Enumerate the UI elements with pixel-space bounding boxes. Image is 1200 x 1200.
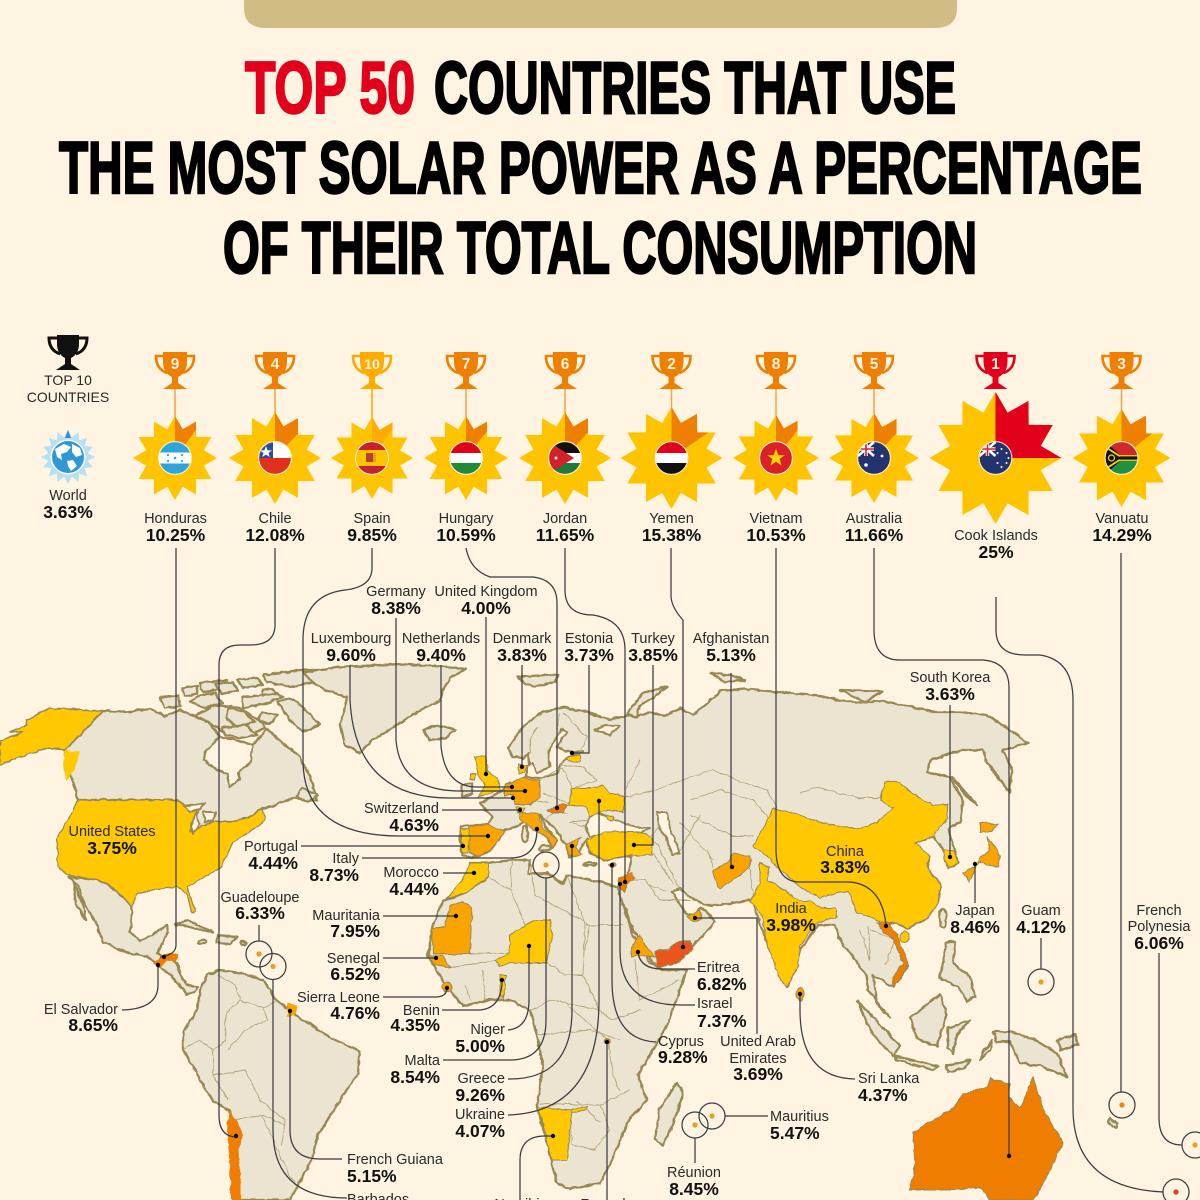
ranking: honduras	[133, 352, 217, 545]
ranking: chile	[229, 352, 322, 545]
label: mauritius	[770, 1109, 829, 1143]
northern ireland	[470, 774, 476, 780]
label: 25%	[978, 542, 1014, 562]
label: morocco: Morocco	[383, 865, 439, 881]
label: united kingdom	[434, 584, 538, 618]
label: switzerland: 4.63%	[389, 815, 439, 835]
label: morocco	[383, 865, 439, 899]
label: guadeloupe	[220, 890, 300, 923]
turkey	[587, 832, 653, 860]
label: mauritius: Mauritius	[770, 1109, 829, 1125]
legend: world globe: World	[49, 488, 87, 504]
label: greece	[455, 1071, 505, 1105]
label: switzerland: Switzerland	[364, 801, 439, 817]
marker: guadeloupe	[246, 941, 272, 967]
trophy 4: 4	[271, 356, 280, 373]
sierra leone	[442, 982, 452, 992]
flag	[858, 442, 890, 474]
trophy 2: 2	[667, 356, 676, 373]
jordan and israel	[618, 873, 635, 892]
label	[436, 511, 496, 545]
baja california	[73, 880, 86, 920]
label: greece: Greece	[457, 1071, 505, 1087]
french guiana	[287, 1003, 297, 1017]
germany and netherlands	[505, 778, 540, 805]
label: 14.29%	[1092, 525, 1152, 545]
south america	[183, 970, 360, 1200]
iceland	[423, 726, 455, 740]
label: Cook Islands	[954, 528, 1038, 544]
estonia	[566, 755, 580, 762]
label: Vietnam	[750, 511, 802, 527]
label: mauritania: Mauritania	[312, 908, 381, 924]
label: israel: Israel	[697, 996, 732, 1012]
crimea	[606, 815, 614, 821]
label: malta: 8.54%	[390, 1067, 440, 1087]
title	[59, 48, 1142, 289]
sun gauge	[1072, 409, 1170, 507]
label: senegal: Senegal	[327, 951, 380, 967]
label: united arab emirates: Emirates	[729, 1051, 787, 1067]
india	[750, 863, 837, 987]
label: afghanistan: Afghanistan	[693, 631, 769, 647]
denmark	[519, 764, 527, 773]
label: ukraine: 4.07%	[455, 1121, 505, 1141]
trophy 7: 7	[462, 356, 470, 373]
eurasia	[460, 689, 1028, 1018]
sun gauge	[424, 408, 508, 500]
marker: malta	[533, 852, 559, 878]
flag	[450, 442, 482, 474]
label: luxembourg: 9.60%	[326, 645, 376, 665]
label: french polynesia	[1128, 903, 1191, 953]
ranking: australia	[829, 352, 919, 545]
label: afghanistan	[693, 631, 769, 665]
trophy 6: 6	[561, 356, 570, 373]
label: benin: Benin	[403, 1003, 440, 1019]
label: netherlands	[402, 631, 480, 665]
label: denmark: 3.83%	[497, 645, 547, 665]
label	[746, 511, 806, 545]
label	[245, 511, 305, 545]
rwanda	[604, 1038, 610, 1044]
label: el salvador: El Salvador	[44, 1002, 118, 1018]
label: guadeloupe: Guadeloupe	[220, 890, 300, 906]
ranking: yemen	[620, 352, 722, 541]
label: Jordan	[543, 511, 587, 527]
label: netherlands: Netherlands	[402, 631, 480, 647]
title: TOP 50	[245, 48, 415, 129]
label: turkey	[628, 631, 678, 665]
marker: vanuatu	[1109, 1092, 1135, 1118]
switzerland	[516, 807, 524, 814]
trophy 8	[757, 352, 795, 389]
trophy 3	[1102, 352, 1140, 389]
label: portugal: 4.44%	[248, 853, 298, 873]
label: Honduras	[144, 511, 207, 527]
label: cyprus: Cyprus	[658, 1034, 704, 1050]
label	[642, 511, 702, 545]
label: el salvador: 8.65%	[68, 1015, 118, 1035]
trophy 8: 8	[772, 356, 781, 373]
label: morocco: 4.44%	[389, 879, 439, 899]
trophy 1: 1	[991, 356, 1000, 373]
label: reunion: Réunion	[667, 1165, 721, 1181]
portugal	[461, 828, 470, 853]
hungary	[548, 803, 568, 813]
label: united kingdom: 4.00%	[461, 598, 511, 618]
label: india	[766, 901, 816, 935]
label: eritrea: 6.82%	[697, 974, 747, 994]
morocco	[447, 863, 488, 898]
label: germany: 8.38%	[371, 598, 421, 618]
label: 10.59%	[436, 525, 496, 545]
label: china: 3.83%	[820, 857, 870, 877]
trophy 3: 3	[1117, 356, 1126, 373]
label: united states: United States	[68, 824, 156, 840]
marker: barbados	[260, 954, 286, 980]
sun gauge	[829, 404, 919, 503]
leader lines	[122, 548, 1182, 1200]
label: guam: 4.12%	[1016, 917, 1066, 937]
internal borders	[450, 713, 895, 1150]
label: denmark	[493, 631, 552, 665]
label: japan	[950, 903, 1000, 937]
label	[845, 511, 904, 545]
trophy 4	[256, 352, 294, 389]
marker: reunion	[682, 1112, 708, 1138]
label: 11.65%	[536, 525, 595, 545]
label: portugal	[244, 839, 298, 873]
chile	[227, 1111, 243, 1200]
flag	[655, 442, 688, 474]
marker: mauritius	[699, 1103, 725, 1129]
label: senegal	[327, 951, 380, 984]
world map	[0, 664, 1117, 1200]
label: french guiana: 5.15%	[347, 1166, 397, 1186]
label: luxembourg	[311, 631, 391, 665]
label: united states	[68, 824, 156, 858]
australia	[910, 1077, 1063, 1200]
label	[536, 511, 595, 545]
label: mauritania	[312, 908, 381, 941]
label: sri lanka: Sri Lanka	[858, 1071, 920, 1087]
small islands: ireland, madagascar, sicily, sardinia	[462, 783, 683, 1145]
marker: guam	[1028, 969, 1054, 995]
label: cyprus: 9.28%	[658, 1047, 708, 1067]
southeast asia and oceania islands	[857, 777, 1117, 1128]
niger	[495, 920, 552, 966]
flag	[259, 442, 291, 474]
namibia	[537, 1107, 572, 1160]
label: guadeloupe: 6.33%	[235, 903, 285, 923]
label: ukraine: Ukraine	[455, 1107, 505, 1123]
label: china	[820, 844, 870, 877]
honduras and el salvador	[153, 954, 179, 968]
marker: cook islands	[1163, 1179, 1189, 1200]
label: italy: Italy	[332, 851, 360, 867]
label: 12.08%	[245, 525, 305, 545]
uae	[687, 910, 702, 921]
label: eritrea	[697, 960, 747, 994]
label: french polynesia: French	[1136, 903, 1182, 919]
united states	[57, 800, 265, 913]
label: greece: 9.26%	[455, 1085, 505, 1105]
label: united kingdom: United Kingdom	[434, 584, 538, 600]
label: niger	[455, 1022, 505, 1056]
trophy 7	[447, 352, 485, 389]
label: united arab emirates: 3.69%	[733, 1064, 783, 1084]
sun gauge	[733, 406, 819, 501]
label: Australia	[846, 511, 903, 527]
label: denmark: Denmark	[493, 631, 552, 647]
benin	[500, 975, 506, 998]
label: reunion: 8.45%	[669, 1179, 719, 1199]
label: japan: Japan	[955, 903, 995, 919]
marker dots	[156, 751, 1011, 1158]
italy	[518, 813, 557, 848]
label: united arab emirates	[720, 1034, 796, 1084]
label: french polynesia: Polynesia	[1128, 919, 1191, 935]
arctic russian islands	[518, 673, 882, 718]
label: benin: 4.35%	[390, 1015, 440, 1035]
north america: canada and arctic islands	[65, 670, 347, 832]
label	[347, 511, 397, 545]
ranking: jordan	[519, 352, 611, 545]
label: germany: Germany	[366, 584, 427, 600]
mauritania	[432, 901, 472, 954]
label: french guiana	[347, 1152, 444, 1186]
label: Vanuatu	[1096, 511, 1148, 527]
trophy 10: 10	[364, 356, 380, 372]
china	[753, 781, 948, 929]
ranking: vietnam	[733, 352, 819, 545]
small territory circle markers	[246, 852, 1200, 1200]
sri lanka	[796, 988, 804, 1000]
yemen	[655, 941, 693, 968]
label	[954, 528, 1038, 562]
label: Hungary	[439, 511, 494, 527]
south america borders	[183, 975, 297, 1187]
label: senegal: 6.52%	[330, 964, 380, 984]
label: cyprus	[658, 1034, 708, 1067]
label: united arab emirates: United Arab	[720, 1034, 796, 1050]
spain	[468, 825, 505, 857]
label: ukraine	[455, 1107, 505, 1141]
afghanistan	[713, 853, 750, 889]
trophy 6	[546, 352, 584, 389]
label: portugal: Portugal	[244, 839, 298, 855]
trophy 1	[976, 352, 1014, 389]
trophy 2	[652, 352, 690, 389]
south korea	[943, 849, 958, 868]
label	[144, 511, 207, 545]
label: reunion	[667, 1165, 721, 1199]
label: 11.66%	[845, 525, 904, 545]
label: switzerland	[364, 801, 439, 835]
greenland	[303, 664, 466, 753]
flag	[1105, 442, 1138, 474]
africa	[428, 860, 687, 1189]
label: Spain	[353, 511, 391, 527]
ranking: hungary	[424, 352, 508, 545]
label: germany	[366, 584, 427, 618]
sun gauge	[930, 392, 1062, 524]
trophy 9: 9	[171, 356, 180, 373]
label: japan: 8.46%	[950, 917, 1000, 937]
label: niger: Niger	[470, 1022, 505, 1038]
ukraine	[568, 785, 625, 817]
label: turkey: Turkey	[631, 631, 676, 647]
united kingdom	[475, 756, 501, 797]
seas: baltic, black, caspian, white	[527, 725, 680, 855]
label: mauritania: 7.95%	[330, 921, 380, 941]
legend: top 10 trophy	[27, 335, 109, 405]
country labels	[44, 584, 1191, 1200]
senegal	[428, 955, 450, 968]
sun gauge	[331, 418, 413, 499]
alaska	[0, 708, 103, 765]
label: sierra leone: 4.76%	[330, 1003, 380, 1023]
legend: world globe: 3.63%	[43, 502, 93, 522]
label: india: 3.98%	[766, 915, 816, 935]
label: Yemen	[649, 511, 694, 527]
trophy 9	[156, 352, 194, 389]
label: french guiana: French Guiana	[347, 1152, 444, 1168]
label: israel: 7.37%	[697, 1011, 747, 1031]
alaska panhandle	[63, 750, 80, 782]
japan honshu	[963, 836, 1000, 882]
label: china: China	[826, 844, 865, 860]
label: turkey: 3.85%	[628, 645, 678, 665]
flag	[159, 442, 191, 474]
label: 15.38%	[642, 525, 702, 545]
flag	[979, 442, 1012, 474]
marker: french polynesia	[1182, 1132, 1200, 1158]
label: netherlands: 9.40%	[416, 645, 466, 665]
japan hokkaido	[980, 822, 997, 832]
label: Chile	[258, 511, 292, 527]
ranking: spain	[331, 352, 413, 545]
label: united states: 3.75%	[87, 838, 137, 858]
trophy 5	[855, 352, 893, 389]
label: eritrea: Eritrea	[697, 960, 741, 976]
label: italy	[309, 851, 360, 885]
label: india: India	[775, 901, 808, 917]
sun gauge	[620, 407, 722, 509]
trophy 5: 5	[870, 356, 879, 373]
label: estonia: 3.73%	[564, 645, 614, 665]
flag	[356, 442, 388, 474]
mexico and central america	[68, 877, 198, 994]
label: french polynesia: 6.06%	[1134, 933, 1184, 953]
trophy 10	[353, 352, 391, 389]
label: sri lanka	[858, 1071, 920, 1105]
greece	[565, 838, 582, 857]
label: mauritius: 5.47%	[770, 1123, 820, 1143]
cyprus	[608, 863, 616, 867]
label: benin	[390, 1003, 440, 1035]
label: 10.25%	[146, 525, 206, 545]
label: sierra leone: Sierra Leone	[297, 990, 380, 1006]
sun gauge	[519, 403, 611, 504]
flag	[549, 442, 581, 474]
label: guam	[1016, 903, 1066, 937]
label: italy: 8.73%	[309, 865, 359, 885]
label: israel	[697, 996, 747, 1031]
great lakes	[184, 803, 216, 834]
legend: top 10 trophy: TOP 10	[44, 372, 92, 388]
caprivi strip	[572, 1107, 587, 1113]
label: luxembourg: Luxembourg	[311, 631, 391, 647]
legend: top 10 trophy: COUNTRIES	[27, 389, 109, 405]
label: el salvador	[44, 1002, 118, 1035]
label	[1092, 511, 1152, 545]
eritrea	[632, 935, 655, 957]
label: south korea: 3.63%	[925, 684, 975, 704]
label: estonia	[564, 631, 614, 665]
label: 9.85%	[347, 525, 397, 545]
label: malta: Malta	[405, 1053, 441, 1069]
label: afghanistan: 5.13%	[706, 645, 756, 665]
legend: world globe	[41, 430, 95, 522]
flag	[760, 442, 792, 474]
label: south korea: South Korea	[910, 670, 991, 686]
ranking: cook islands	[930, 352, 1062, 558]
label: south korea	[910, 670, 991, 704]
highlighted countries	[428, 755, 1063, 1200]
top banner	[244, 0, 957, 28]
sun gauge	[133, 408, 217, 500]
sun gauge	[229, 412, 321, 504]
label: sri lanka: 4.37%	[858, 1085, 908, 1105]
label: niger: 5.00%	[455, 1036, 505, 1056]
label: malta	[390, 1053, 441, 1087]
label: estonia: Estonia	[565, 631, 614, 647]
label: 10.53%	[746, 525, 806, 545]
vietnam	[877, 922, 908, 987]
label: sierra leone	[297, 990, 380, 1023]
caribbean islands	[175, 920, 246, 944]
ranking: vanuatu	[1072, 352, 1179, 545]
label: guam: Guam	[1021, 903, 1061, 919]
